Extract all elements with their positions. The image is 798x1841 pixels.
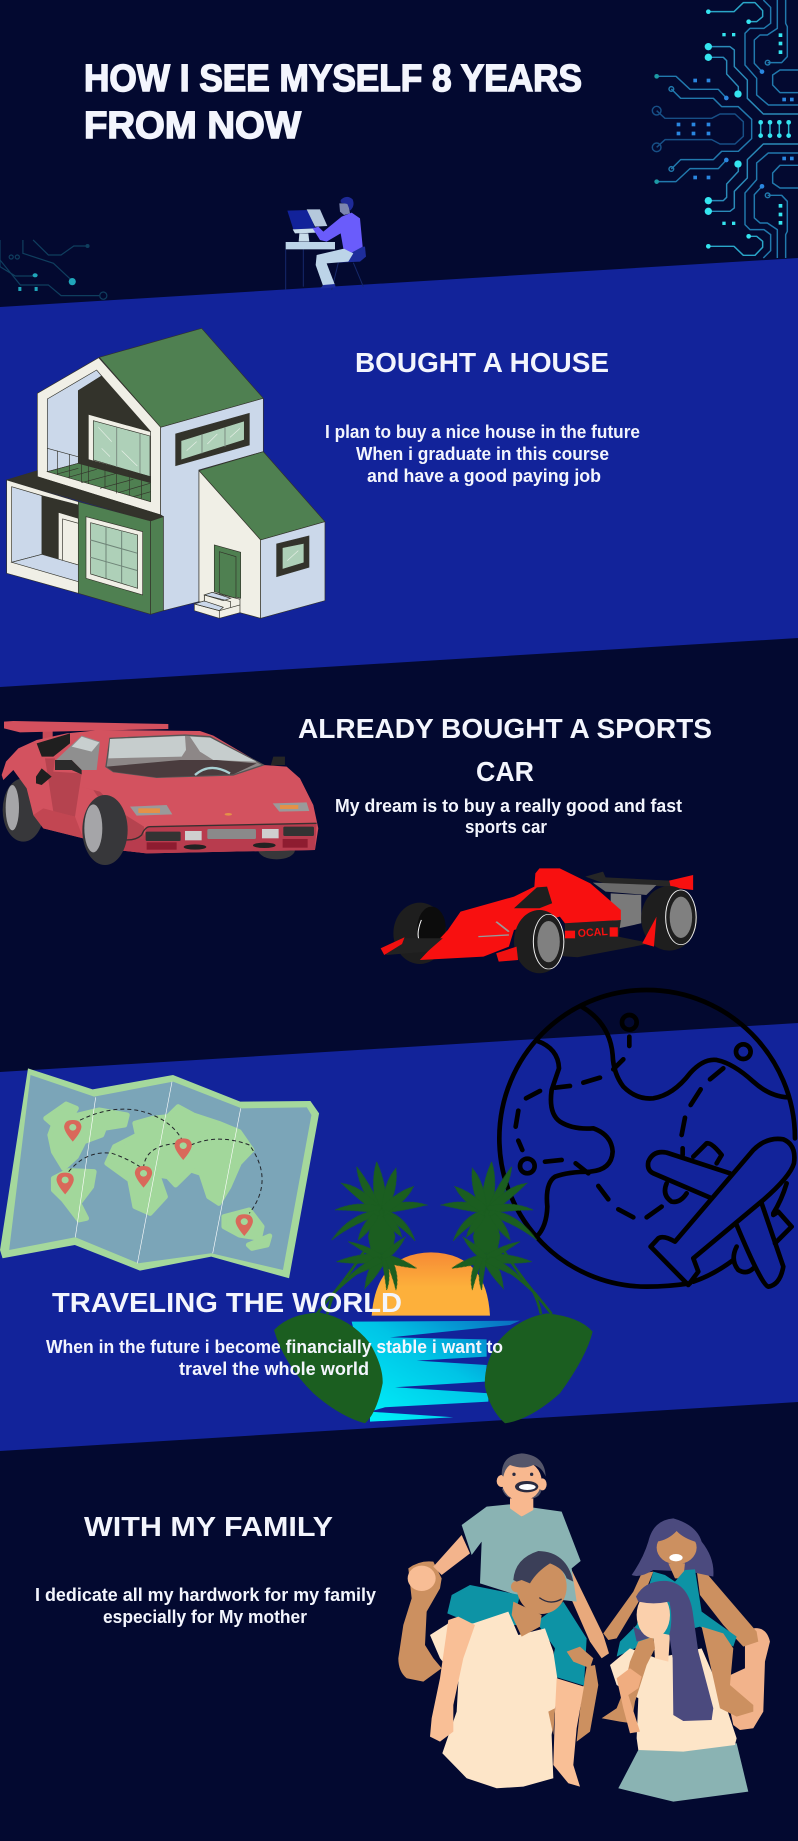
text: house description: When i graduate in this course (356, 443, 609, 464)
heading: sports car (298, 713, 712, 787)
heading: traveling the world: TRAVELING THE WORLD (52, 1287, 402, 1318)
text: travel description: travel the whole world (179, 1358, 369, 1379)
father's raised arm (398, 1561, 442, 1682)
title: HOW I SEE MYSELF 8 YEARS (84, 58, 582, 100)
icon: red sports car (2, 721, 318, 865)
icon: circuit board left (0, 240, 107, 299)
title: FROM NOW (84, 105, 301, 147)
heading: sports car: CAR (476, 756, 534, 787)
icon: circuit board right (652, 0, 798, 258)
icon: red formula one car: OCAL (577, 926, 608, 940)
text: family description (35, 1584, 377, 1627)
icon: tropical sunset with palms (274, 1162, 593, 1423)
father (430, 1551, 593, 1788)
heading: bought a house: BOUGHT A HOUSE (355, 347, 609, 378)
heading: with my family: WITH MY FAMILY (84, 1511, 333, 1542)
mother (602, 1581, 753, 1802)
icon: red formula one car (381, 868, 697, 973)
icon: house (7, 328, 325, 618)
text: car description (335, 795, 682, 837)
text: family description: I dedicate all my hardwork for my family (35, 1584, 377, 1605)
text: car description: sports car (465, 816, 547, 837)
icon: family illustration (398, 1453, 770, 1802)
text: house description (325, 421, 640, 486)
title (84, 58, 582, 147)
panel: house band (0, 258, 798, 687)
text: car description: My dream is to buy a really good and fast (335, 795, 682, 816)
text: travel description: When in the future i become financially stable i want to (46, 1336, 503, 1357)
text: house description: and have a good paying job (367, 465, 601, 486)
panel: travel band (0, 1023, 798, 1451)
girl on shoulders (603, 1518, 770, 1730)
boy on shoulders (408, 1453, 609, 1742)
icon: person at computer (286, 197, 366, 290)
icon: globe with plane (499, 990, 795, 1287)
text: travel description (46, 1336, 503, 1379)
heading: sports car: ALREADY BOUGHT A SPORTS (298, 713, 712, 744)
text: family description: especially for My mother (103, 1606, 307, 1627)
icon: folded world map (0, 1068, 319, 1278)
text: house description: I plan to buy a nice house in the future (325, 421, 640, 442)
